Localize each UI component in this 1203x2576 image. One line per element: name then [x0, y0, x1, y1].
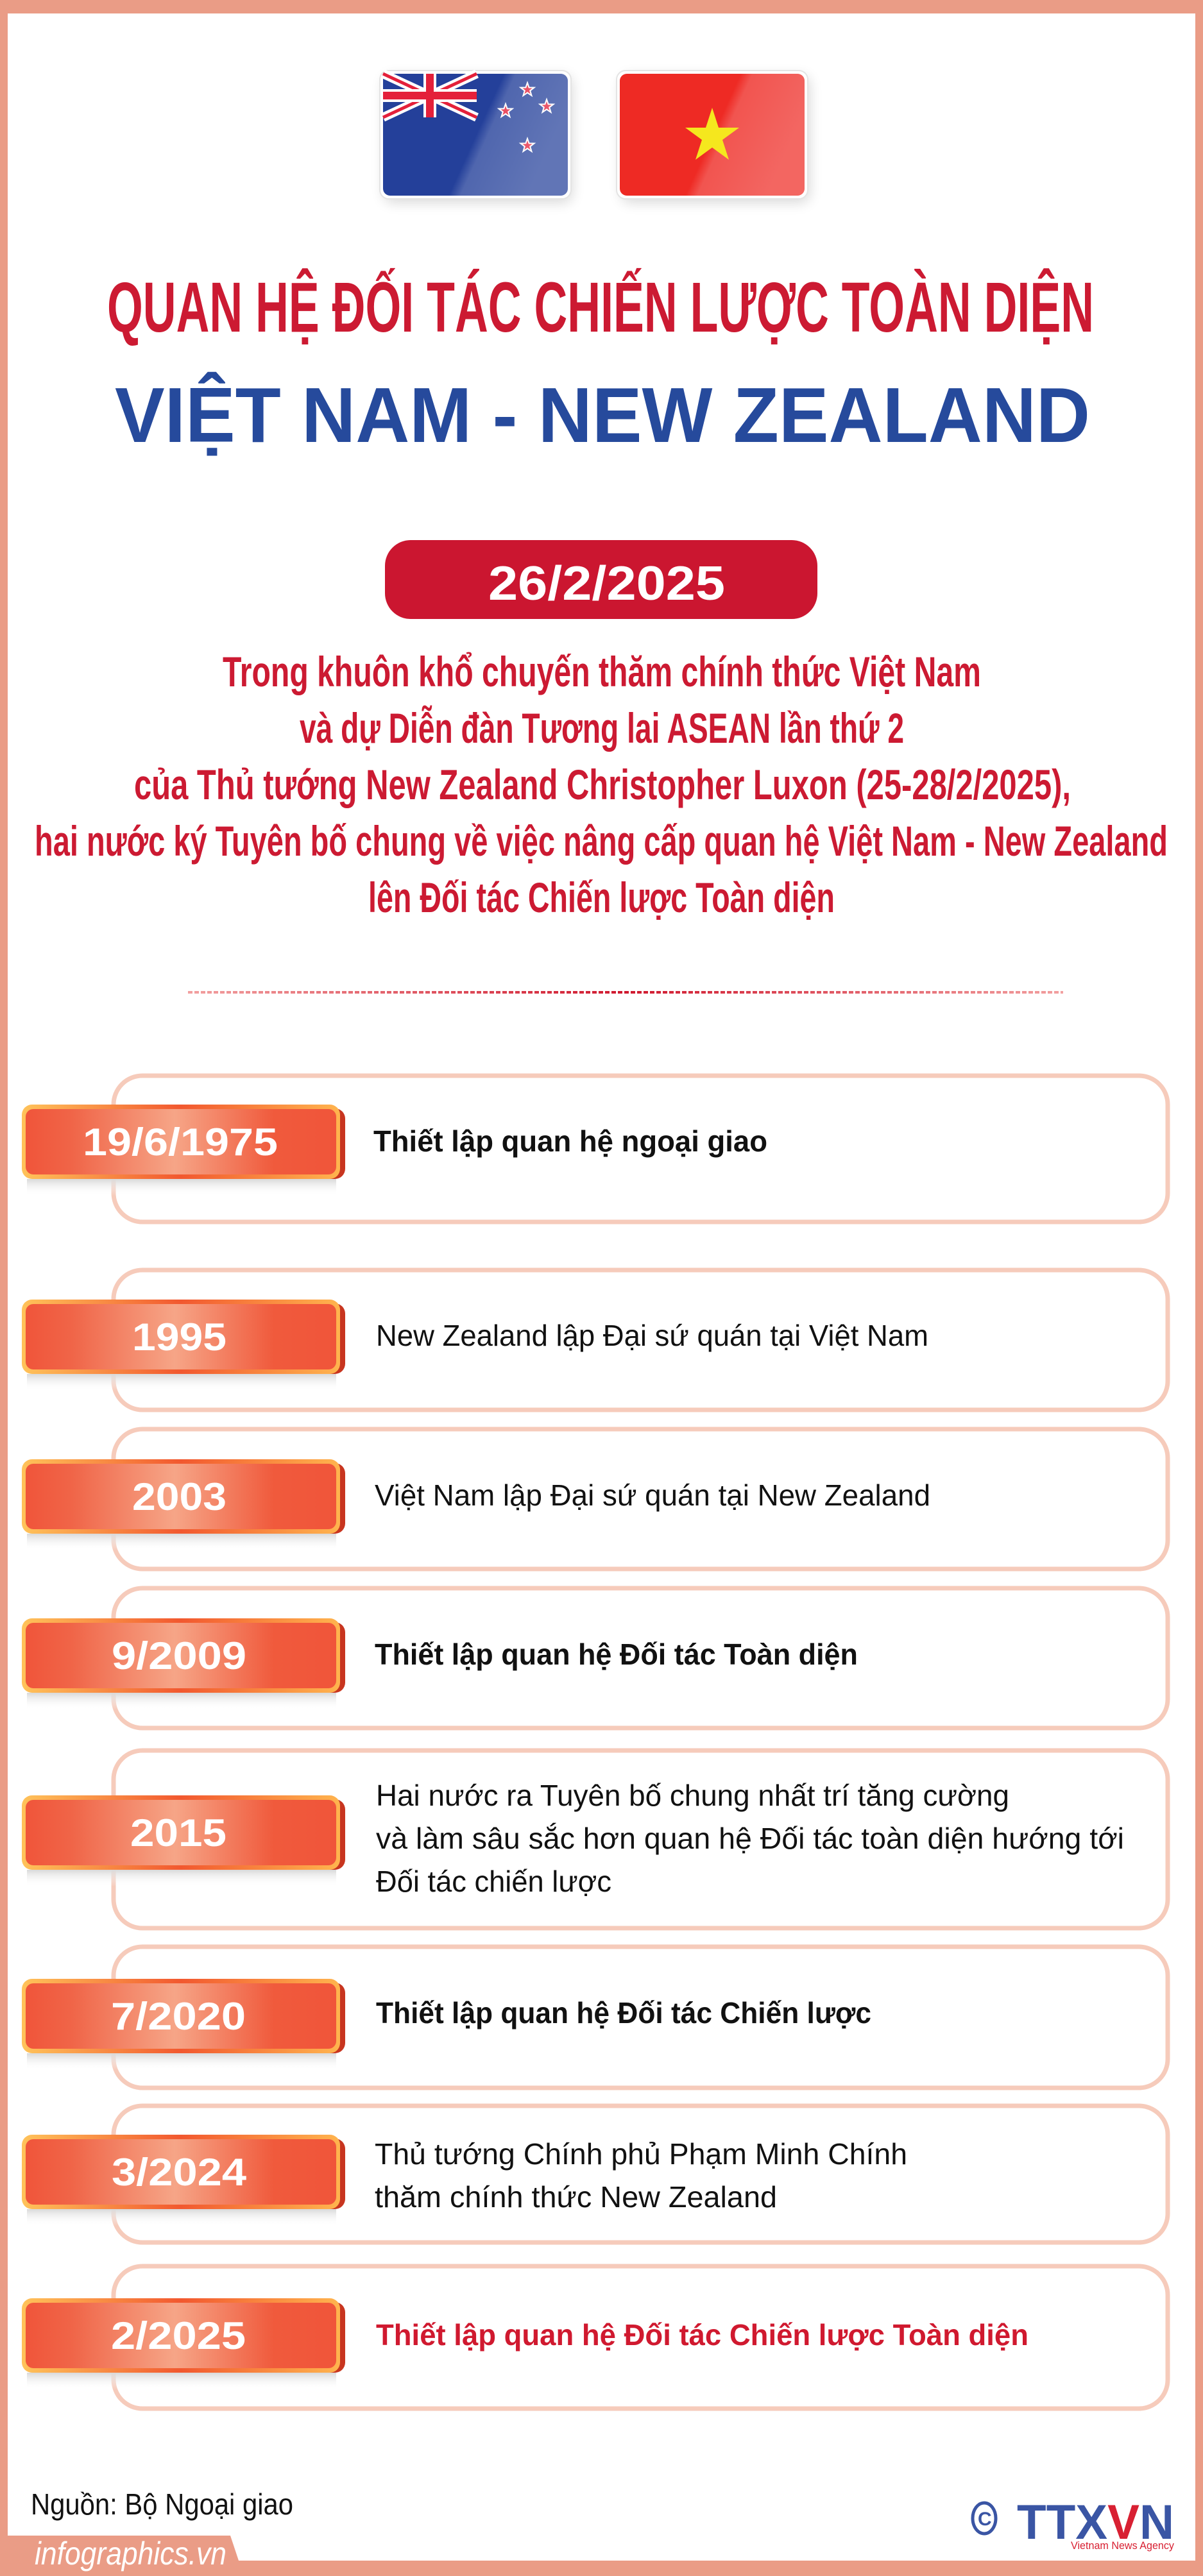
intro text block: và dự Diễn đàn Tương lai ASEAN lần thứ 2	[300, 704, 904, 752]
timeline item: 3/2024: 3/2024	[112, 2151, 247, 2194]
timeline item: 3/2024: Thủ tướng Chính phủ Phạm Minh Chính	[375, 2137, 907, 2171]
timeline item: 19/6/1975: Thiết lập quan hệ ngoại giao	[373, 1124, 767, 1158]
timeline item: 7/2020: Thiết lập quan hệ Đối tác Chiến lược	[376, 1996, 871, 2029]
source text: Nguồn: Bộ Ngoại giao	[31, 2487, 293, 2521]
timeline item: 9/2009: 9/2009	[112, 1634, 246, 1677]
timeline item: 3/2024	[22, 2106, 1168, 2242]
timeline item: 1995: 1995	[132, 1316, 226, 1359]
intro text block: lên Đối tác Chiến lược Toàn diện	[368, 874, 835, 921]
timeline item: 2003: 2003	[132, 1475, 226, 1518]
timeline item: 2015: 2015	[130, 1811, 226, 1854]
footer: infographics.vn tab	[0, 2536, 1203, 2576]
timeline item: 9/2009	[22, 1588, 1168, 1728]
date badge: 26/2/2025	[488, 556, 725, 610]
timeline item: 2015	[22, 1750, 1168, 1928]
timeline item: 19/6/1975: 19/6/1975	[83, 1121, 278, 1164]
timeline item: 19/6/1975	[22, 1076, 1168, 1222]
footer: infographics.vn tab: infographics.vn	[35, 2536, 226, 2572]
timeline item: 9/2009: Thiết lập quan hệ Đối tác Toàn diện	[375, 1638, 858, 1671]
timeline item: 2015: Hai nước ra Tuyên bố chung nhất trí tăng cường	[376, 1779, 1009, 1812]
date badge	[385, 540, 817, 619]
icon: New Zealand flag	[380, 71, 572, 203]
logo: TTXVN: TTXVN	[1017, 2495, 1174, 2550]
icon: Viet Nam flag	[617, 71, 810, 203]
timeline item: 2015: và làm sâu sắc hơn quan hệ Đối tác toàn diện hướng tới	[376, 1822, 1124, 1855]
logo: TTXVN: C	[978, 2509, 992, 2530]
timeline item: 1995: New Zealand lập Đại sứ quán tại Việt Nam	[376, 1319, 928, 1352]
title: VIỆT NAM - NEW ZEALAND	[115, 371, 1090, 459]
intro text block	[35, 648, 1168, 921]
timeline item: 2/2025	[22, 2266, 1168, 2409]
timeline item: 2003	[22, 1429, 1168, 1569]
timeline item: 7/2020	[22, 1947, 1168, 2088]
timeline item: 2003: Việt Nam lập Đại sứ quán tại New Zealand	[375, 1479, 930, 1512]
timeline item: 3/2024: thăm chính thức New Zealand	[375, 2180, 777, 2214]
timeline item: 1995	[22, 1270, 1168, 1410]
timeline item: 7/2020: 7/2020	[111, 1995, 246, 2038]
title	[107, 268, 1094, 459]
timeline item: 2015: Đối tác chiến lược	[376, 1865, 611, 1898]
logo: TTXVN: Vietnam News Agency	[1071, 2539, 1174, 2552]
timeline item: 2/2025: Thiết lập quan hệ Đối tác Chiến lược Toàn diện	[376, 2318, 1028, 2351]
timeline item: 2/2025: 2/2025	[111, 2314, 246, 2357]
